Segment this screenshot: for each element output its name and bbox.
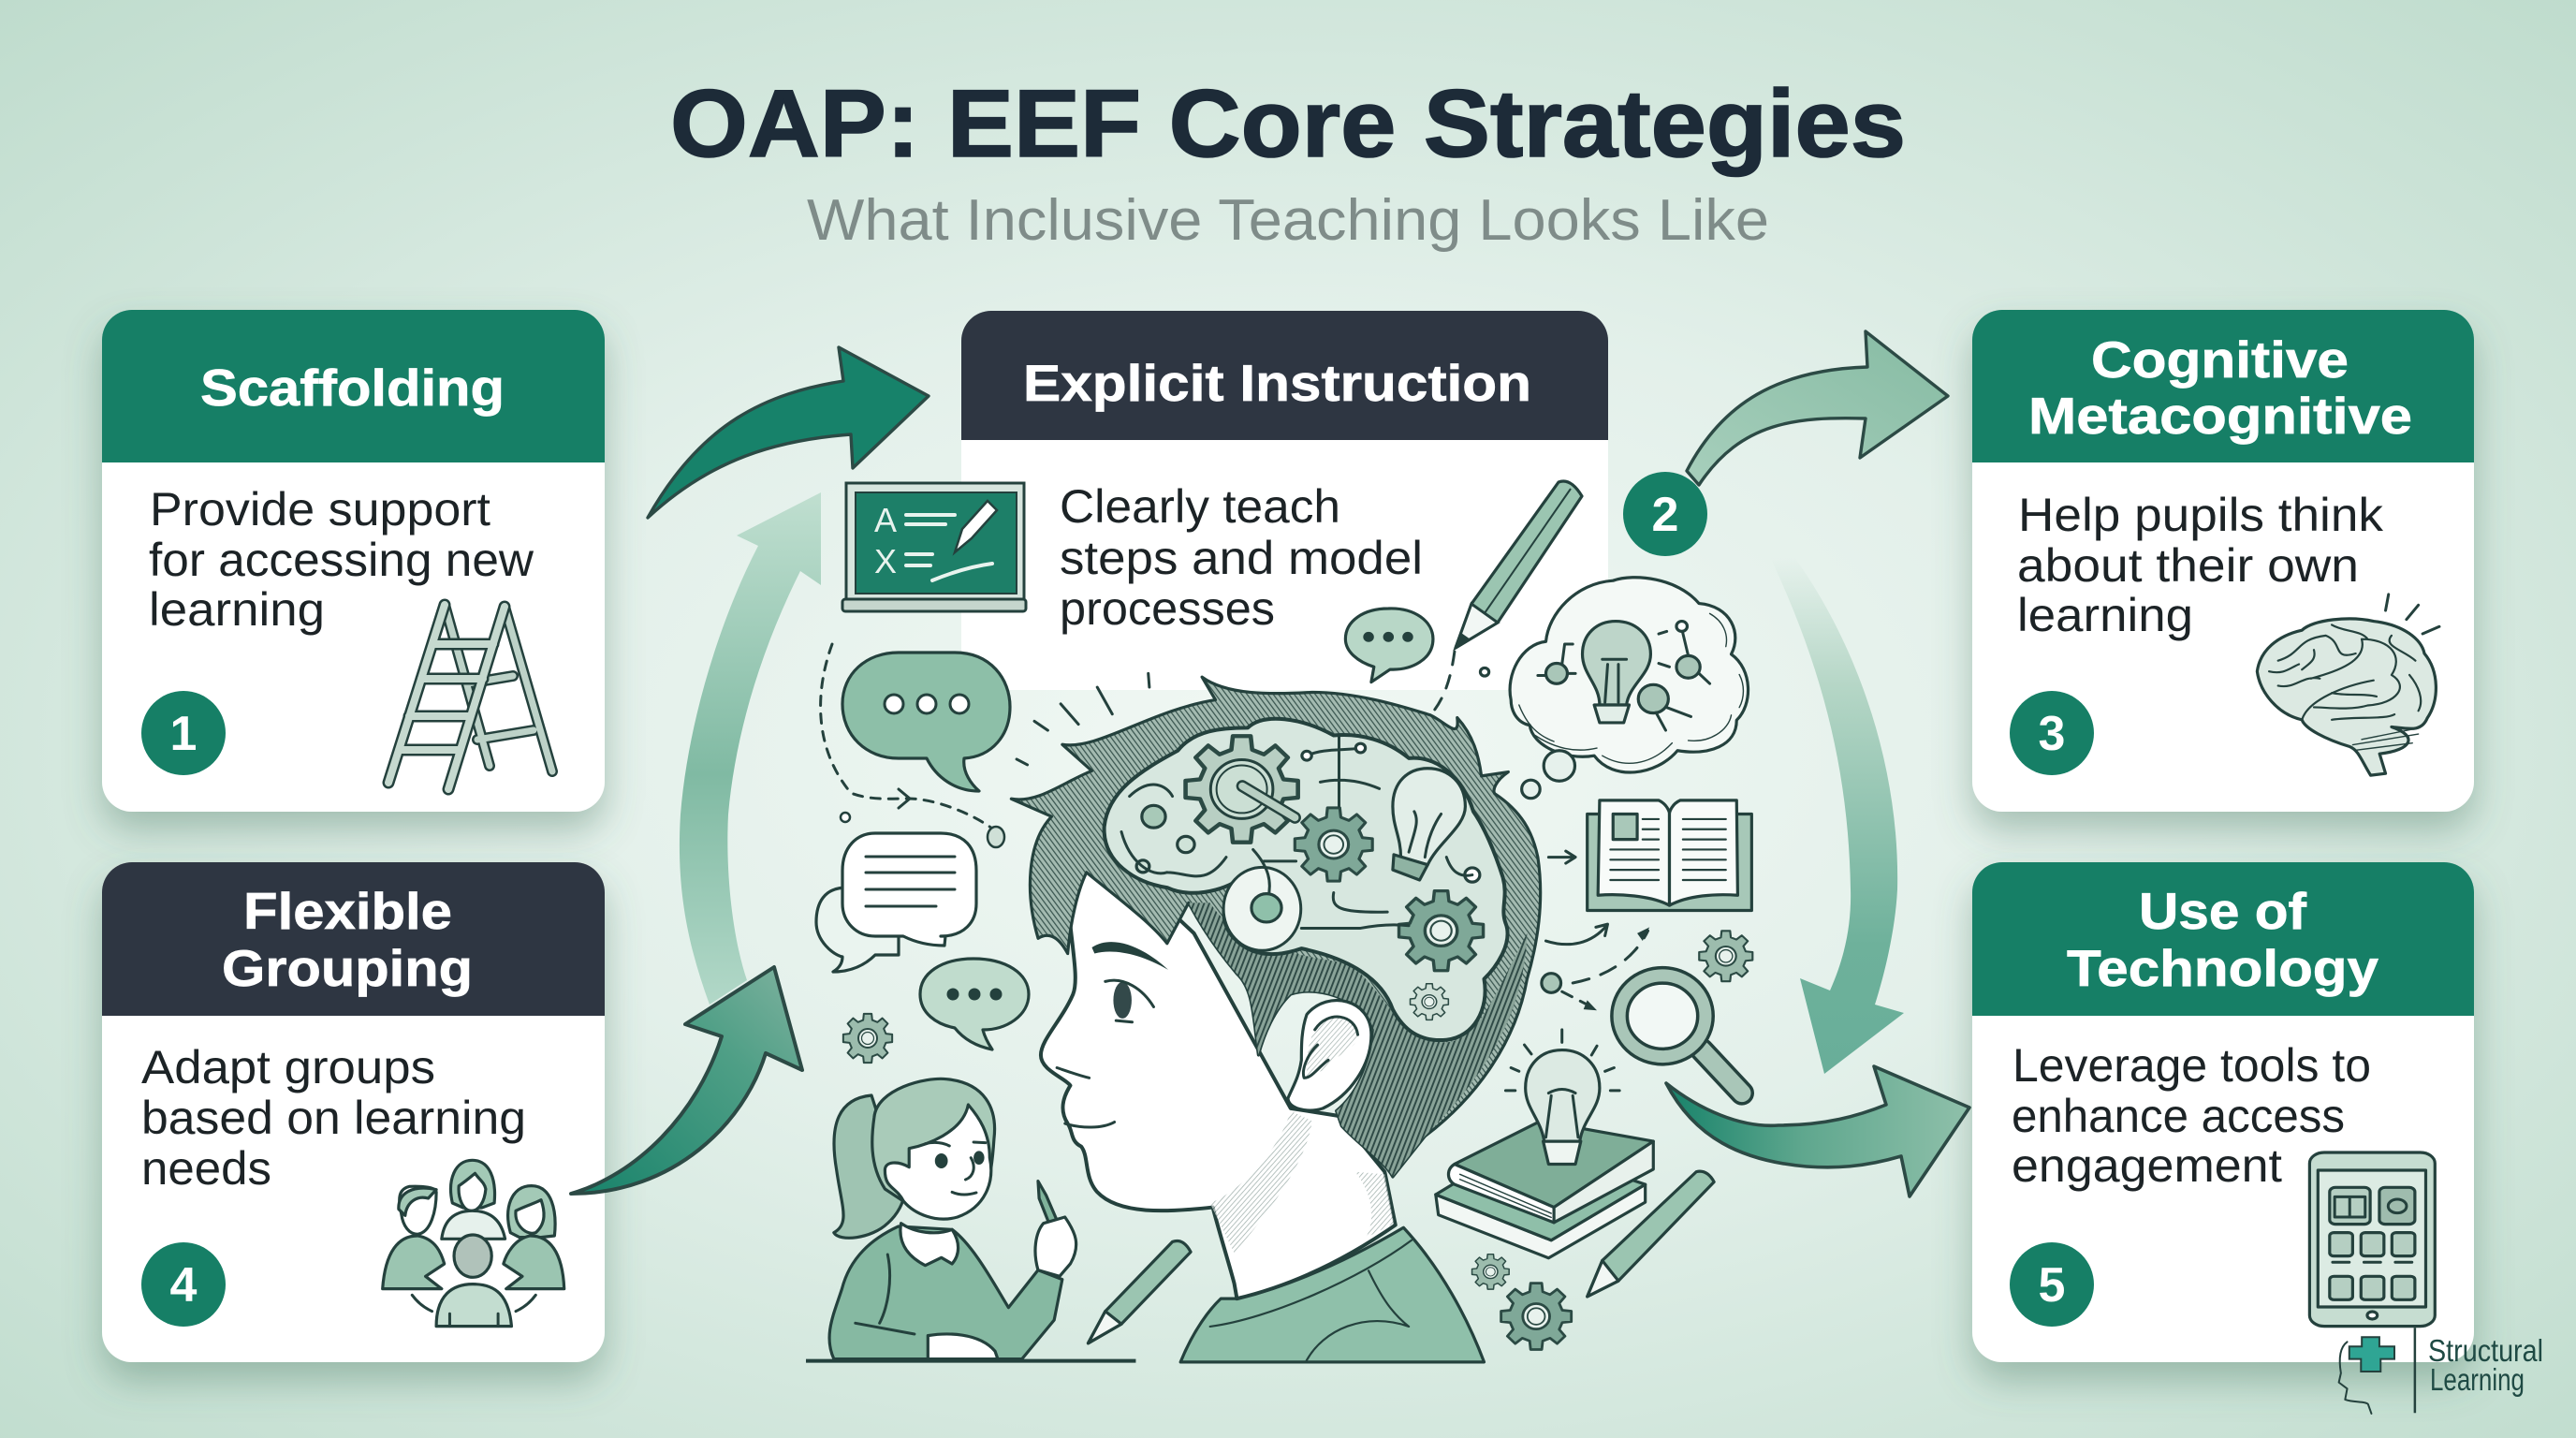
arrow: large light arc rising on left [680,492,821,1005]
magnifying glass [1619,976,1742,1093]
panel: cognitive metacognitive [1972,310,2474,812]
logo: structural learning: Learning [2430,1362,2525,1397]
cognitive metacognitive header [1972,310,2474,462]
lines radiating from head [1017,673,1149,765]
flexible grouping heading: Grouping [222,939,473,997]
flexible grouping text: Adapt groups [141,1041,435,1093]
brain cutaway [1105,719,1508,1040]
scaffolding text: Provide support [150,483,490,536]
number 3 [2010,691,2094,775]
thought bubbles [1480,668,1574,799]
girl head hair [872,1078,995,1201]
icon: blackboard [842,483,1026,611]
arrow: scaffolding to explicit instruction [648,347,929,518]
subtitle: What Inclusive Teaching Looks Like [807,188,1769,253]
dashed line to pencil [1430,652,1455,715]
small arrows to book [1542,851,1649,1010]
arrow: centre to use of technology [1666,1066,1969,1196]
flexible grouping text: based on learning [141,1092,526,1144]
boy hair [1011,677,1541,1177]
speech bubble behind text bubble [816,888,899,972]
cognitive metacognitive heading [2028,330,2412,445]
explicit instruction header [961,311,1608,440]
boy ear [1288,1001,1371,1110]
gears bottom right [1472,1255,1572,1350]
flexible grouping text [141,1041,526,1195]
explicit instruction text: steps and model [1060,532,1423,584]
icon: ladder [388,605,552,789]
cognitive metacognitive text: Help pupils think [2018,489,2384,541]
number 1: 1 [170,707,197,761]
use of technology text: enhance access [2012,1090,2345,1142]
explicit instruction text [1060,480,1423,635]
use of technology heading: Technology [2067,939,2378,997]
bulb above books [1505,1030,1619,1164]
desk [806,1359,1135,1363]
pencil right [1588,1171,1714,1297]
cognitive metacognitive heading: Cognitive [2091,330,2349,389]
explicit instruction heading: Explicit Instruction [1023,354,1531,412]
speech bubble green with dots [842,653,1010,791]
flexible grouping heading: Flexible [243,882,452,940]
icon: blackboard: X [874,542,897,580]
arrow: large light arc descending on right [1770,557,1904,1074]
speech bubble with lines [842,833,976,946]
small girl at desk [806,1078,1135,1361]
girl sweater [829,1226,1062,1359]
scaffolding heading: Scaffolding [200,359,505,417]
scaffolding text [149,483,534,636]
girl face [885,1105,991,1219]
speech bubbles left of boy [816,644,1029,1063]
number 4: 4 [170,1258,198,1313]
pencil lower left [1088,1240,1191,1343]
icon: tablet [2309,1152,2435,1327]
number 2 [1623,472,1707,556]
use of technology text: engagement [2012,1139,2282,1192]
number 4 [141,1242,226,1327]
girl lower hand [928,1334,998,1359]
small speech bubble [1345,609,1433,682]
boy back hair darker strands [1189,902,1527,1177]
flexible grouping header [102,862,605,1016]
brain gears [1186,736,1484,1020]
cognitive metacognitive text: about their own [2017,539,2359,592]
arrow: explicit instruction to cognitive [1687,331,1948,485]
cognitive metacognitive text [2017,489,2384,641]
gear left [843,1014,892,1063]
number 1 [141,691,226,775]
scaffolding text: learning [149,583,325,636]
dashed arrow between bubbles [821,644,1004,847]
girl raised hand and pencil [1035,1181,1076,1276]
number 3: 3 [2039,707,2065,761]
icon: group of people [383,1160,564,1327]
panel: scaffolding [102,310,605,812]
boy shirt [1180,1227,1484,1362]
boy eye and brow [1057,942,1168,1127]
brain pathways [1121,736,1480,928]
use of technology text: Leverage tools to [2012,1039,2371,1092]
girl ponytail [834,1095,903,1238]
arrow: flexible grouping to centre [571,967,802,1194]
use of technology header [1972,862,2474,1016]
number 5 [2010,1242,2094,1327]
cognitive metacognitive text: learning [2017,589,2193,641]
girl collar [900,1224,959,1266]
icon: brain [2257,594,2439,775]
panel: explicit instruction [842,311,1608,690]
explicit instruction text: Clearly teach [1060,480,1340,533]
number 5: 5 [2039,1258,2065,1313]
icon: large pencil [1456,481,1582,648]
flexible grouping heading [222,882,473,997]
number 2: 2 [1652,488,1678,542]
logo head and plus icon [2339,1328,2415,1414]
scaffolding text: for accessing new [149,534,534,586]
flexible grouping text: needs [141,1142,271,1195]
brain lightbulb [1393,769,1465,880]
logo text: Structural [2428,1333,2543,1368]
gear right [1699,931,1752,981]
scaffolding header [102,310,605,462]
neck shading [1210,1111,1394,1253]
logo: structural learning [2339,1328,2543,1414]
use of technology text [2012,1039,2371,1192]
open book [1588,800,1751,910]
speech bubble with three dark dots [920,959,1029,1049]
use of technology heading: Use of [2139,882,2307,940]
title: OAP: EEF Core Strategies [670,70,1906,177]
thought cloud with bulb [1510,578,1749,772]
illustration: central boy and idea icons [1011,578,1752,1362]
icon: blackboard: A [874,501,897,539]
use of technology heading [2067,882,2378,997]
explicit instruction text: processes [1060,582,1275,635]
panel: use of technology [1972,862,2474,1362]
boy face and neck [1041,862,1396,1299]
stacked books with bulb [1436,1121,1653,1258]
cognitive metacognitive heading: Metacognitive [2028,387,2412,445]
panel: flexible grouping [102,862,605,1362]
